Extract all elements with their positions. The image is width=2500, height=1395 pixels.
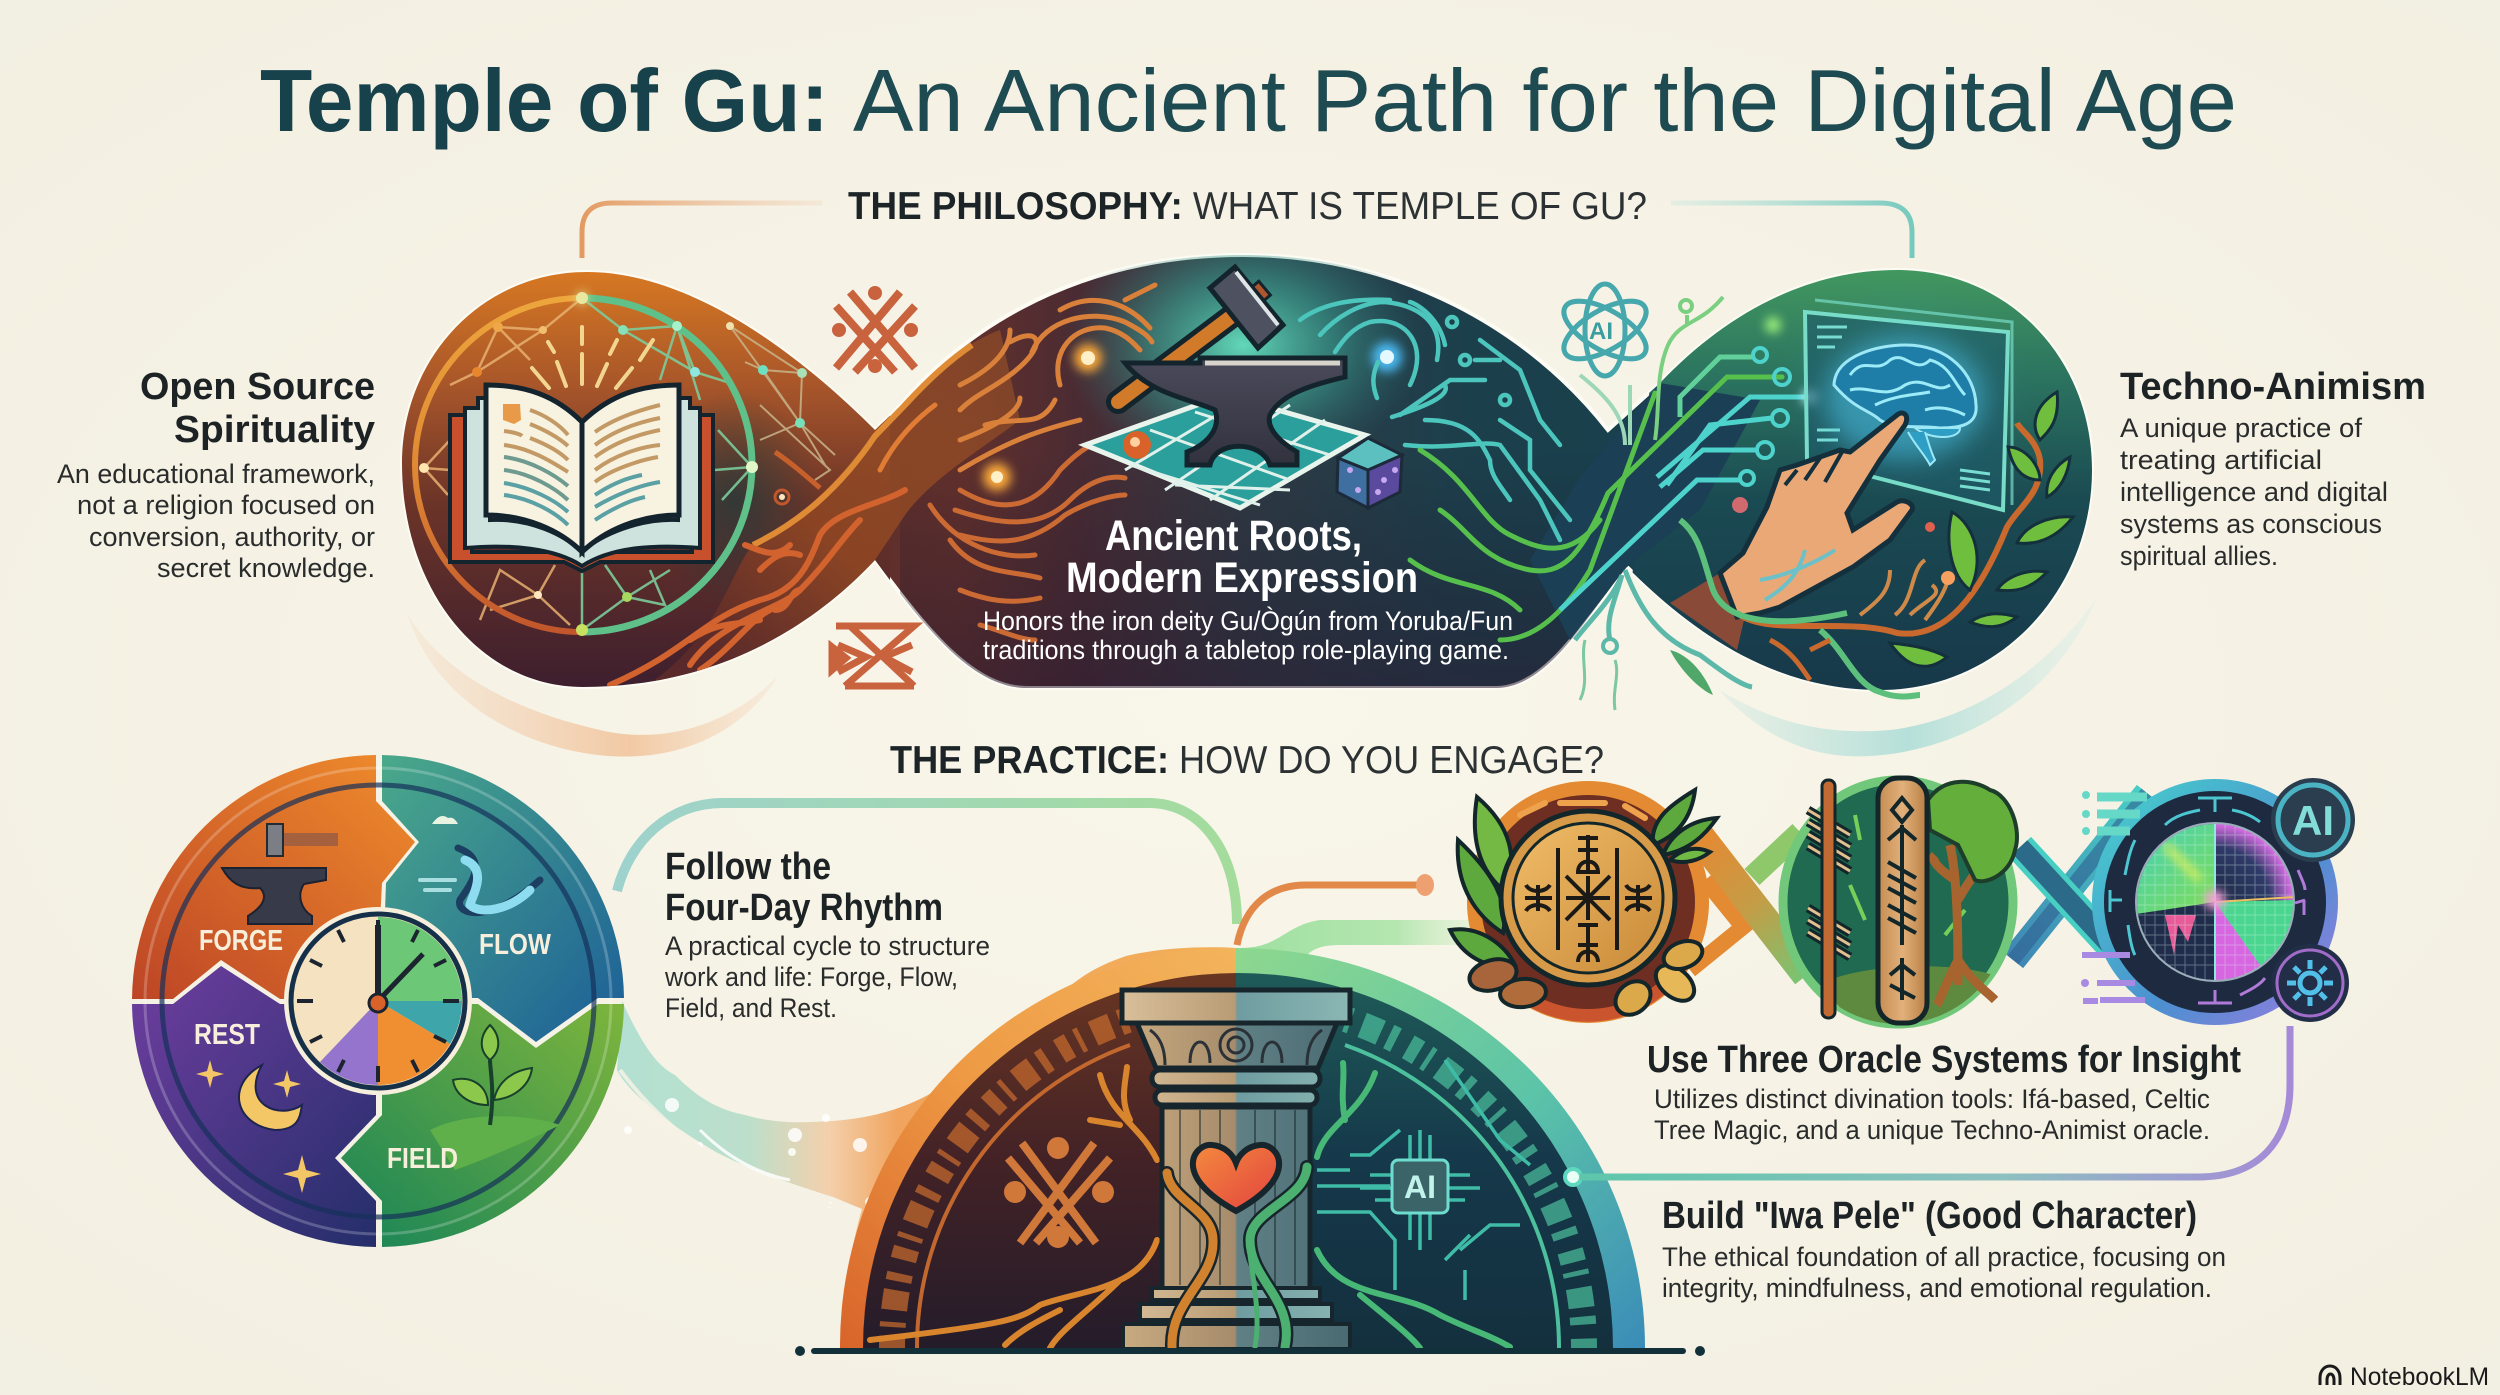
icon: die xyxy=(1337,438,1402,508)
ring glyphs xyxy=(2110,798,2260,955)
circuits in right lobe xyxy=(1560,357,1810,610)
panel: dome foundation xyxy=(840,948,1645,1350)
text: open source spirituality: An educational framework, xyxy=(57,459,375,489)
crescent: teal under right lobe xyxy=(1719,597,2097,756)
centre text: traditions through a tabletop role-playing game. xyxy=(983,635,1509,665)
oracle three: techno-animist orb xyxy=(2081,778,2355,1022)
tree xyxy=(1928,782,2017,1005)
icon: glowing brain xyxy=(1825,336,1985,465)
badge: gear xyxy=(2271,944,2349,1022)
centre text: Ancient Roots, xyxy=(1105,512,1362,560)
circuits right-centre xyxy=(1300,300,1570,540)
centre text: Modern Expression xyxy=(1066,554,1418,602)
circuits xyxy=(1317,1060,1530,1300)
text: follow the four-day rhythm: Four-Day Rhythm xyxy=(665,887,943,929)
text: techno-animism: A unique practice of xyxy=(2120,413,2362,443)
bracket: right connector xyxy=(1671,203,1912,258)
green vines crossing right xyxy=(1410,377,1782,640)
text: techno-animism: Techno-Animism xyxy=(2120,366,2426,408)
badge: ai xyxy=(2271,778,2355,862)
text: open source spirituality: Spirituality xyxy=(174,409,375,451)
bracket: left connector xyxy=(582,203,822,258)
text: three oracle systems: Utilizes distinct divination tools: Ifá-based, Celtic xyxy=(1654,1084,2210,1114)
runes xyxy=(1525,835,1652,962)
label: field: FIELD xyxy=(387,1143,458,1175)
crossing band: left xyxy=(640,330,1020,700)
text: open source spirituality xyxy=(57,366,375,583)
ring in left lobe: orange half xyxy=(415,298,582,632)
connector: dome to oracle xyxy=(1237,885,1425,945)
inner ring of wheel xyxy=(145,768,611,1234)
network nodes xyxy=(419,292,807,636)
text: techno-animism: systems as conscious xyxy=(2120,509,2382,539)
text: open source spirituality: not a religion focused on xyxy=(77,490,375,520)
icon: reaching hand xyxy=(1670,413,1913,650)
text: techno-animism: treating artificial xyxy=(2120,445,2322,475)
icon: sprout xyxy=(430,1025,560,1170)
leaves xyxy=(1450,790,1717,966)
orb xyxy=(2137,824,2293,980)
icon: tribal x pattern xyxy=(832,286,918,373)
swoosh: wheel to dome xyxy=(617,947,1240,1348)
text: open source spirituality: conversion, authority, or xyxy=(89,522,375,552)
data lines xyxy=(2081,791,2147,1001)
panel: infinity illustration xyxy=(400,215,2100,710)
anvil top highlight xyxy=(1205,360,1340,366)
label: rest: REST xyxy=(194,1019,260,1051)
glow dots left-centre xyxy=(983,342,1402,491)
icon: vines and leaves xyxy=(1680,392,2073,697)
rune band left xyxy=(879,1009,1132,1348)
oracle one: ifa disc xyxy=(1450,781,1717,1023)
segment: rest xyxy=(132,966,376,1247)
band: green halo around dome xyxy=(1240,920,1500,970)
text: three oracle systems xyxy=(1647,1039,2241,1145)
icon: digital screen xyxy=(1805,300,2012,510)
icon: roots below crossing xyxy=(1575,570,1752,710)
panel: four-day wheel xyxy=(132,755,624,1247)
segment: flow xyxy=(382,755,624,1042)
icon: vines above crossing xyxy=(1580,297,1723,445)
icon: forge anvil xyxy=(222,824,338,924)
sparkles on swoosh xyxy=(620,1070,875,1210)
icon: ai chip xyxy=(1392,1160,1448,1213)
segment: field xyxy=(341,1004,624,1247)
dome interior xyxy=(860,970,1616,1350)
label: flow: FLOW xyxy=(479,929,552,961)
icon: game board xyxy=(1085,395,1365,508)
silhouette: infinity base xyxy=(402,255,2092,690)
heading: the practice: THE PRACTICE: HOW DO YOU ENGAGE? xyxy=(890,739,1604,782)
crossing band highlight xyxy=(753,345,972,545)
icon: heart xyxy=(1193,1145,1279,1211)
label: forge: FORGE xyxy=(199,925,283,957)
roots around heart xyxy=(1167,1167,1307,1347)
plank xyxy=(1878,778,1927,1023)
icon: tribal hourglass pattern xyxy=(832,626,914,686)
crossing band: right xyxy=(1530,383,1760,640)
icon: AI atom xyxy=(1555,284,1655,376)
centre text xyxy=(983,512,1513,665)
icon: flow wave xyxy=(420,816,540,913)
book rays xyxy=(532,327,653,388)
text: iwa pele xyxy=(1662,1195,2226,1303)
centre text: Honors the iron deity Gu/Ògún from Yoruba/Fun xyxy=(983,605,1513,636)
text: three oracle systems: Tree Magic, and a unique Techno-Animist oracle. xyxy=(1654,1115,2210,1145)
connector: oracle to character xyxy=(1580,1026,2290,1177)
icon: hammer xyxy=(1118,267,1283,402)
crescent: orange under left lobe xyxy=(407,613,778,757)
symbol: crossed lines xyxy=(1008,1141,1110,1244)
text: iwa pele: The ethical foundation of all practice, focusing on xyxy=(1662,1242,2226,1272)
dna strip links xyxy=(1690,793,2147,975)
text: techno-animism xyxy=(2120,366,2426,571)
title: An Ancient Path for the Digital Age xyxy=(853,51,2237,150)
dome ring left xyxy=(840,948,1236,1348)
icon: ai chip: AI xyxy=(1404,1169,1436,1205)
heading: the philosophy: THE PHILOSOPHY: WHAT IS TEMPLE OF GU? xyxy=(848,185,1647,228)
icon: pillar xyxy=(1122,990,1350,1349)
vines left-centre xyxy=(610,405,935,685)
logo: notebooklm: NotebookLM xyxy=(2350,1363,2489,1391)
text: iwa pele: integrity, mindfulness, and emotional regulation. xyxy=(1662,1273,2212,1303)
rune band right xyxy=(1342,1008,1597,1348)
text: follow the four-day rhythm: Field, and Rest. xyxy=(665,993,837,1023)
connector node xyxy=(1416,874,1434,896)
text: follow the four-day rhythm xyxy=(664,846,990,1023)
title xyxy=(260,51,2237,150)
stick xyxy=(1808,780,1850,1018)
text: techno-animism: intelligence and digital xyxy=(2120,477,2388,507)
icon: anvil xyxy=(1125,358,1345,465)
lobe artwork clipped to silhouette xyxy=(402,255,2092,690)
dome ring right xyxy=(1236,948,1645,1348)
text: open source spirituality: Open Source xyxy=(140,366,375,408)
title: Temple of Gu: xyxy=(260,51,829,150)
network lines in left lobe xyxy=(424,298,582,625)
ground line xyxy=(795,1346,1705,1356)
panel: three oracle systems xyxy=(1450,778,2355,1030)
connector node on dome xyxy=(1565,1169,1581,1185)
icon: open book xyxy=(450,385,713,571)
trees xyxy=(870,1067,1157,1348)
icon: moon and stars xyxy=(196,1060,321,1193)
kola nuts xyxy=(1466,936,1706,1022)
icon: clock xyxy=(284,907,472,1095)
text: iwa pele: Build "Iwa Pele" (Good Character) xyxy=(1662,1195,2197,1237)
text: follow the four-day rhythm: A practical cycle to structure xyxy=(665,931,990,961)
text: follow the four-day rhythm: work and life: Forge, Flow, xyxy=(664,962,958,992)
text: three oracle systems: Use Three Oracle Systems for Insight xyxy=(1647,1039,2241,1081)
text: open source spirituality: secret knowledge. xyxy=(157,553,375,583)
rune guide arcs xyxy=(917,1045,1130,1348)
segment: forge xyxy=(132,755,415,999)
badge: ai: AI xyxy=(2292,797,2334,844)
oracle two: celtic tree xyxy=(1783,778,2017,1030)
text: follow the four-day rhythm: Follow the xyxy=(665,846,831,888)
icon: AI atom: AI xyxy=(1589,318,1613,345)
text: techno-animism: spiritual allies. xyxy=(2120,541,2278,571)
connector: rhythm to dome xyxy=(617,803,1237,924)
vines centre-left xyxy=(960,285,1155,470)
ring in left lobe: green half xyxy=(582,298,752,632)
